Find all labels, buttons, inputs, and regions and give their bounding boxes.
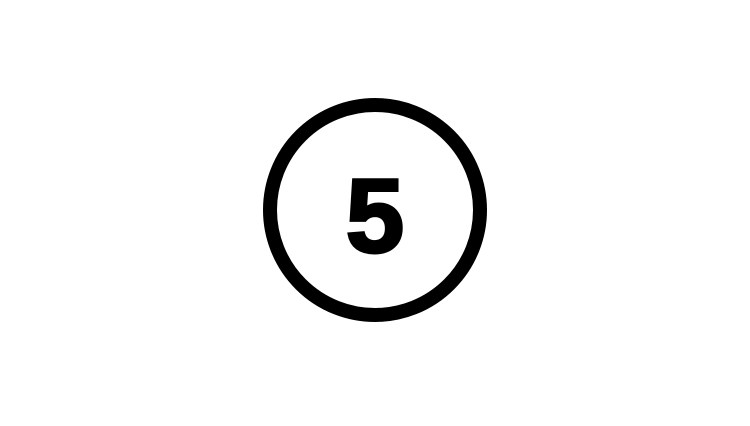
icon: circle ring with number 5: 5 <box>346 158 404 275</box>
icon: circle ring with number 5 <box>270 105 480 315</box>
